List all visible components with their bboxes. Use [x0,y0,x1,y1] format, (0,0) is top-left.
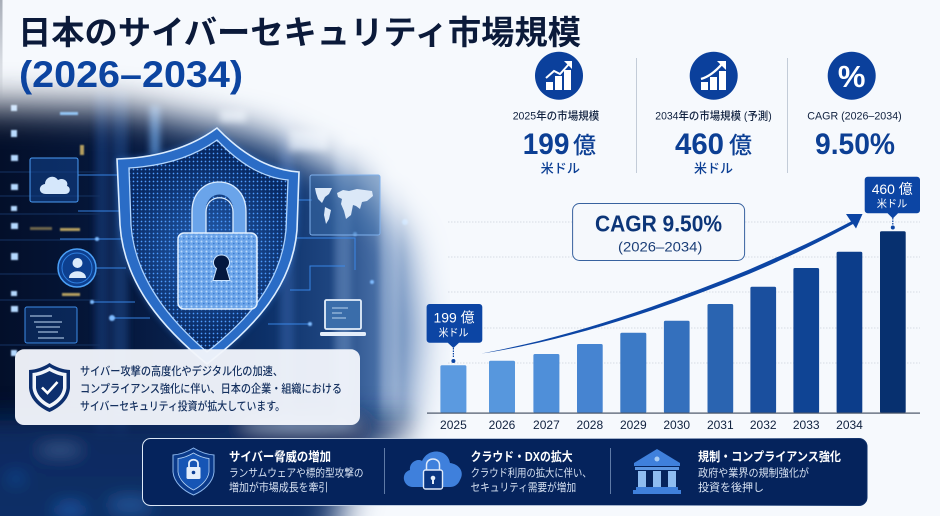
KPI: 2025 market size: 199 [523,128,569,161]
KPI: 2034 market size forecast: 460 [675,128,724,161]
callout: 199 oku USD [427,304,482,363]
bar chart [427,222,920,432]
KPI: CAGR: CAGR (2026–2034) [807,110,902,122]
KPI: CAGR: % [838,59,865,94]
background photo: server racks and digital shield [0,60,450,516]
bar chart: 2031 [707,418,734,432]
icon: laptop [320,300,366,336]
KPI: 2034 market size forecast [655,52,772,176]
callout: 460 oku USD [865,177,920,230]
icon: user in circle [58,249,96,287]
callout: 199 oku USD: 199 億 [434,309,474,325]
icon: floating cloud panel [30,158,78,202]
bar chart: 2033 [793,418,820,432]
growth arrow [482,214,862,354]
text: summary copy: コンプライアンス強化に伴い、日本の企業・組織における [80,381,342,395]
driver: cloud and DX [404,449,592,494]
callout: 199 oku USD: 米ドル [438,326,468,339]
text: summary copy: サイバー攻撃の高度化やデジタル化の加速、 [80,364,283,378]
driver: cyber threats: ランサムウェアや標的型攻撃の [229,466,364,480]
panel: market drivers [142,438,867,506]
text: summary copy: サイバーセキュリティ投資が拡大しています。 [80,399,285,413]
KPI: 2034 market size forecast: 億 [729,132,752,158]
bar chart: 2027 [533,418,560,432]
callout: CAGR 9.50%: CAGR 9.50% [595,211,722,237]
KPI: CAGR [807,52,902,161]
KPI: 2025 market size: 2025年の市場規模 [513,108,599,122]
title: (2026–2034) [19,54,243,95]
KPI: 2025 market size [513,52,599,176]
divider [610,448,611,494]
icon: shield with check mark [29,363,70,412]
bar chart: 2032 [750,418,777,432]
title: 日本のサイバーセキュリティ市場規模 [18,14,581,51]
callout: CAGR 9.50% [573,204,745,260]
driver: regulation and compliance: 投資を後押し [698,480,764,494]
driver: cyber threats [173,448,364,495]
KPI: CAGR: 9.50% [815,128,895,161]
title [18,14,581,95]
KPI: 2025 market size: 米ドル [541,161,580,176]
bar chart: 2028 [576,418,603,432]
driver: cloud and DX: セキュリティ需要が増加 [471,480,576,494]
bar chart: 2025 [440,418,467,432]
KPI: 2034 market size forecast: 米ドル [694,161,733,176]
KPI: 2025 market size: 億 [573,132,596,158]
driver: cloud and DX: クラウド・DXの拡大 [471,449,573,464]
driver: regulation and compliance: 政府や業界の規制強化が [698,466,809,480]
divider [384,448,385,494]
KPI: 2034 market size forecast: 2034年の市場規模 (予測) [655,108,772,122]
bar chart: 2029 [620,418,647,432]
driver: regulation and compliance: 規制・コンプライアンス強化 [698,449,841,464]
divider [787,58,788,173]
callout: 460 oku USD: 米ドル [877,197,907,210]
icon: world map panel [310,175,380,235]
digital security shield with padlock [117,128,299,364]
bar chart: 2026 [489,418,516,432]
driver: cloud and DX: クラウド利用の拡大に伴い、 [471,466,592,480]
text: summary copy [80,364,342,413]
callout: CAGR 9.50%: (2026–2034) [618,240,702,255]
bar chart: 2030 [663,418,690,432]
divider [636,58,637,173]
icon: code window panel [25,307,77,343]
driver: cyber threats: サイバー脅威の増加 [229,449,331,464]
driver: regulation and compliance [633,449,841,494]
bar chart: 2034 [836,418,863,432]
driver: cyber threats: 増加が市場成長を牽引 [229,480,328,494]
callout: 460 oku USD: 460 億 [872,181,913,197]
panel: market summary [15,349,360,425]
